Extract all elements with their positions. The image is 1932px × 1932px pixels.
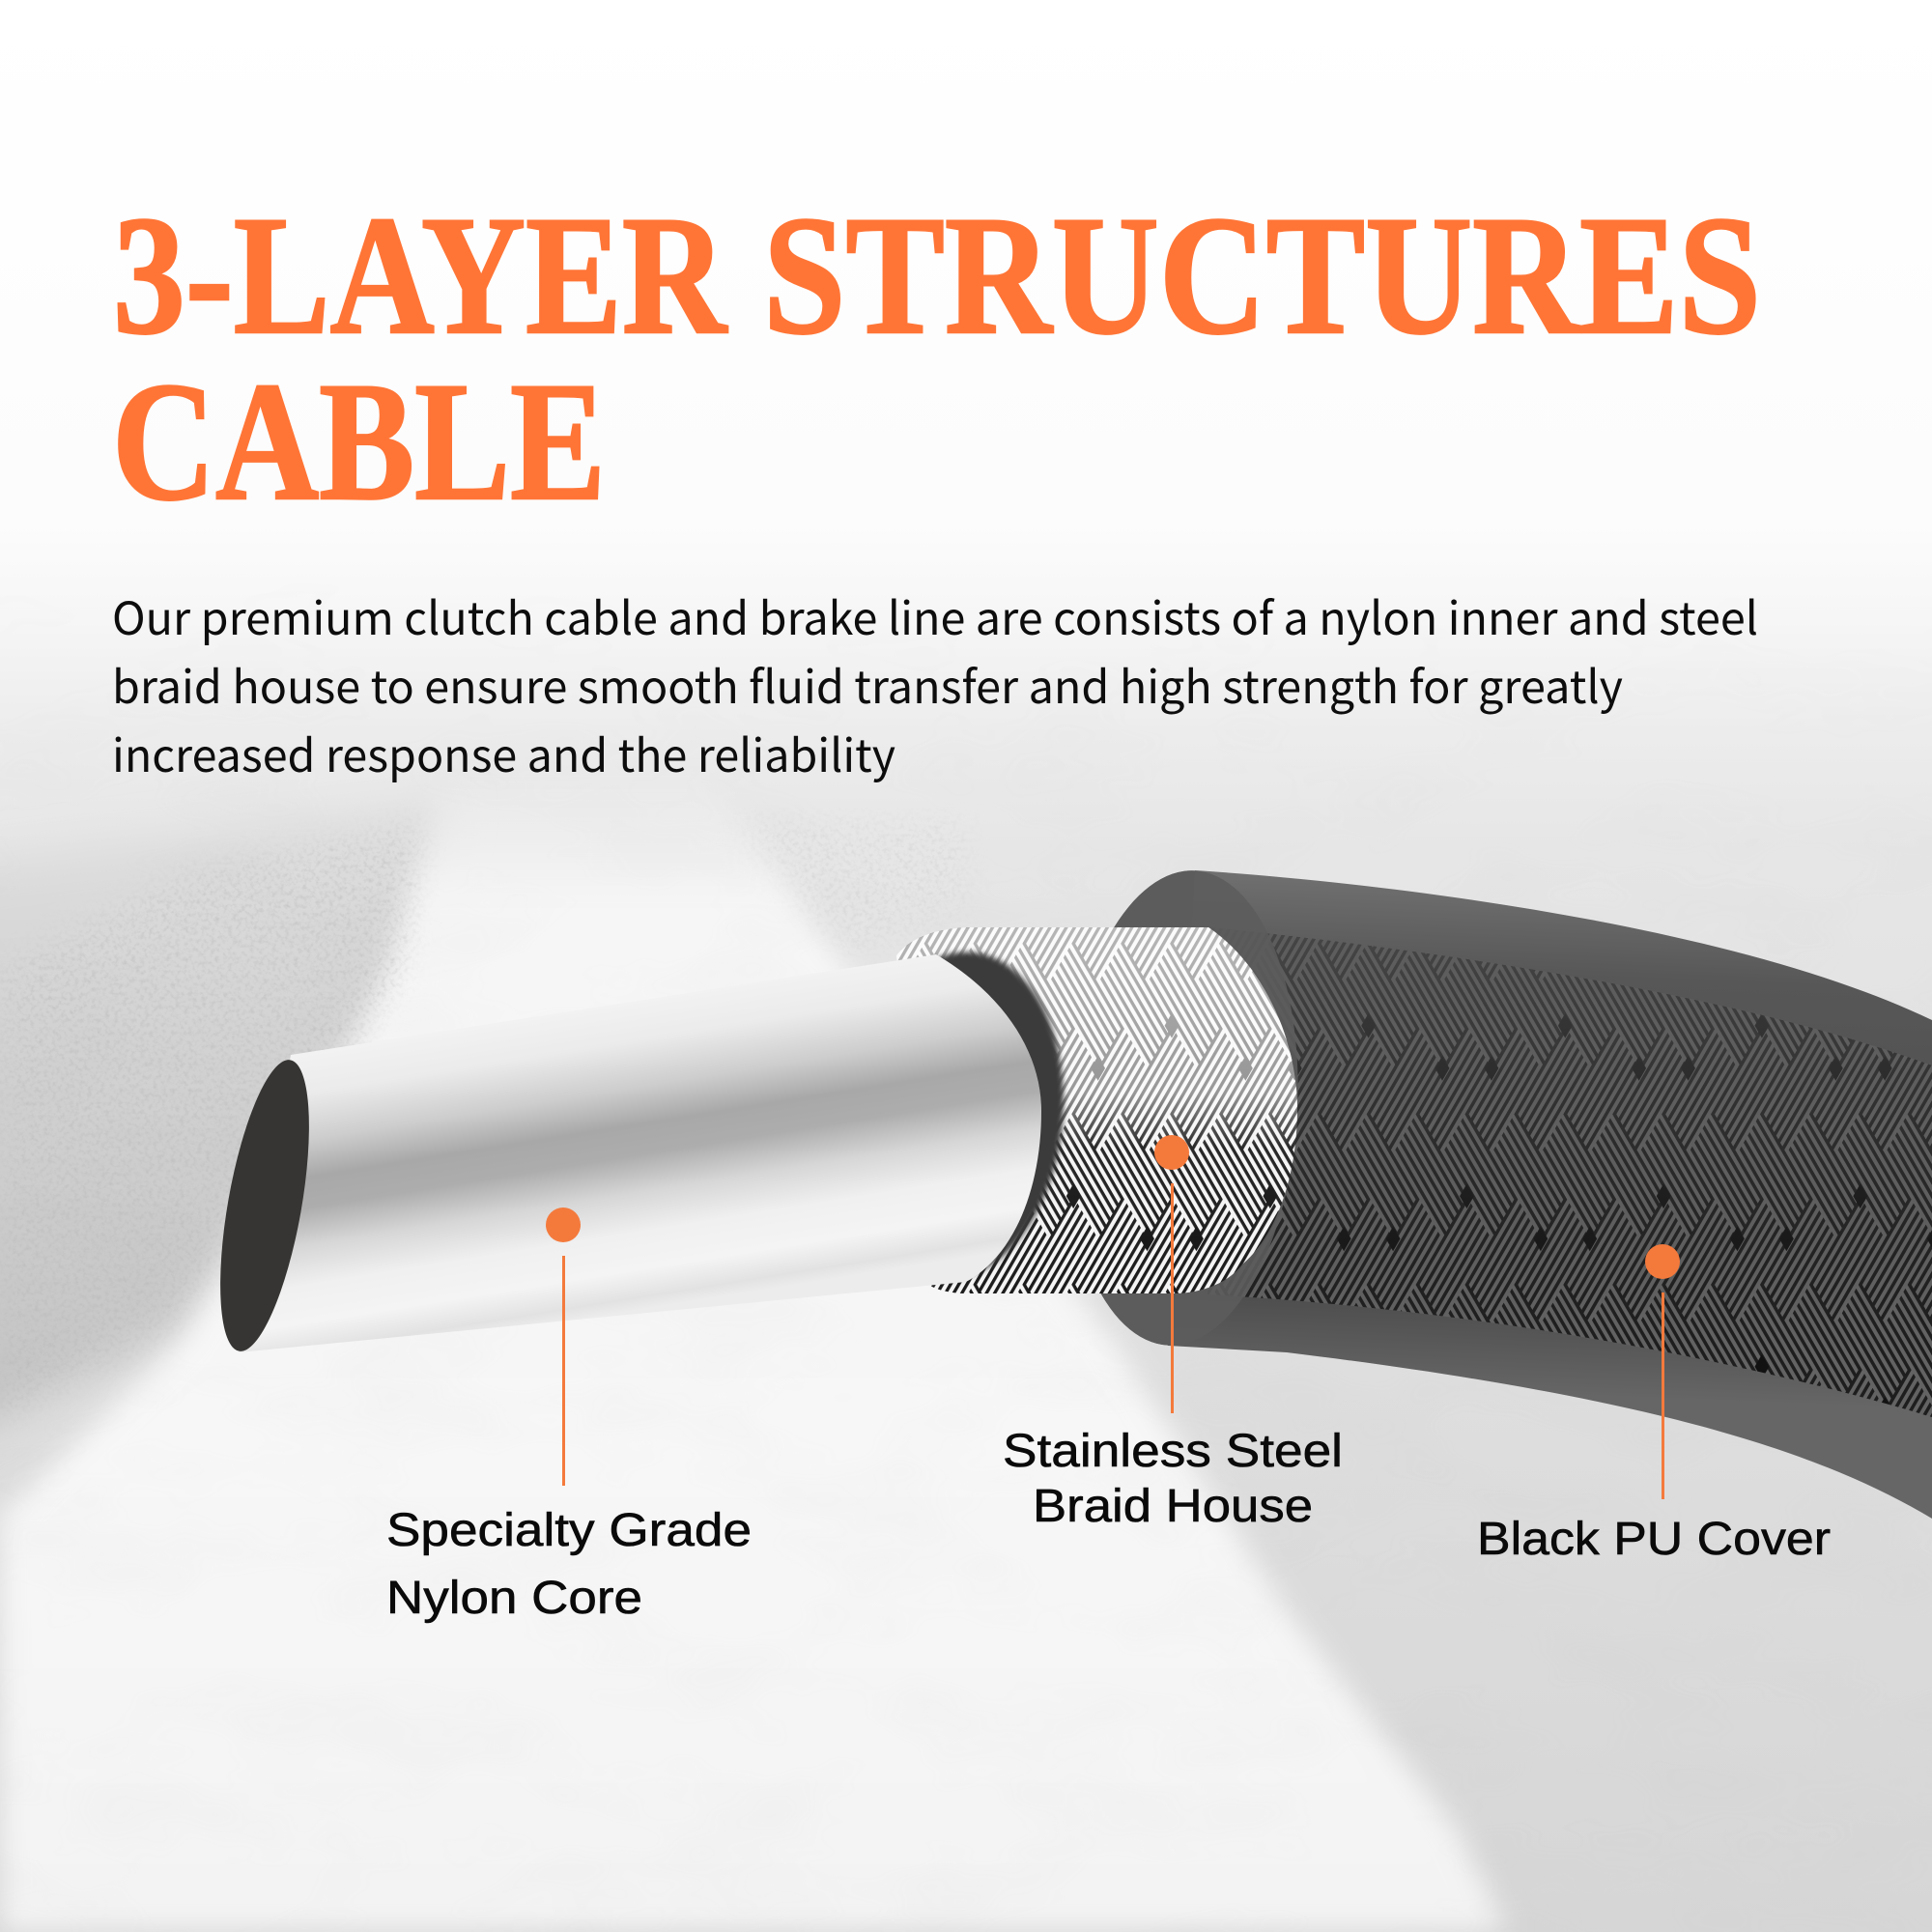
callout: black PU cover: Black PU Cover (1477, 1514, 1831, 1565)
callout: stainless steel braid (1003, 1135, 1343, 1532)
description text: increased response and the reliability (112, 719, 895, 785)
layer: black PU cover (1052, 865, 1932, 1519)
callout: nylon core (386, 1208, 752, 1624)
description text (112, 582, 1758, 785)
callout: stainless steel braid: Braid House (1033, 1481, 1313, 1532)
title: STRUCTURES (763, 182, 1761, 370)
title (112, 182, 1761, 536)
background: foggy road scene (0, 587, 1932, 1932)
callout: stainless steel braid: Stainless Steel (1003, 1426, 1343, 1477)
cable illustration (203, 865, 1932, 1519)
callout: nylon core: Specialty Grade (386, 1505, 752, 1556)
description text: braid house to ensure smooth fluid transfer and high strength for greatly (112, 650, 1623, 717)
layer: stainless steel braid (834, 927, 1297, 1293)
callout: nylon core: Nylon Core (386, 1573, 642, 1624)
callout: black PU cover (1477, 1244, 1831, 1565)
description text: Our premium clutch cable and brake line are consists of a nylon inner and steel (112, 582, 1758, 648)
title: CABLE (112, 348, 606, 536)
title: 3-LAYER (113, 182, 728, 370)
layer: nylon core (203, 954, 1041, 1357)
